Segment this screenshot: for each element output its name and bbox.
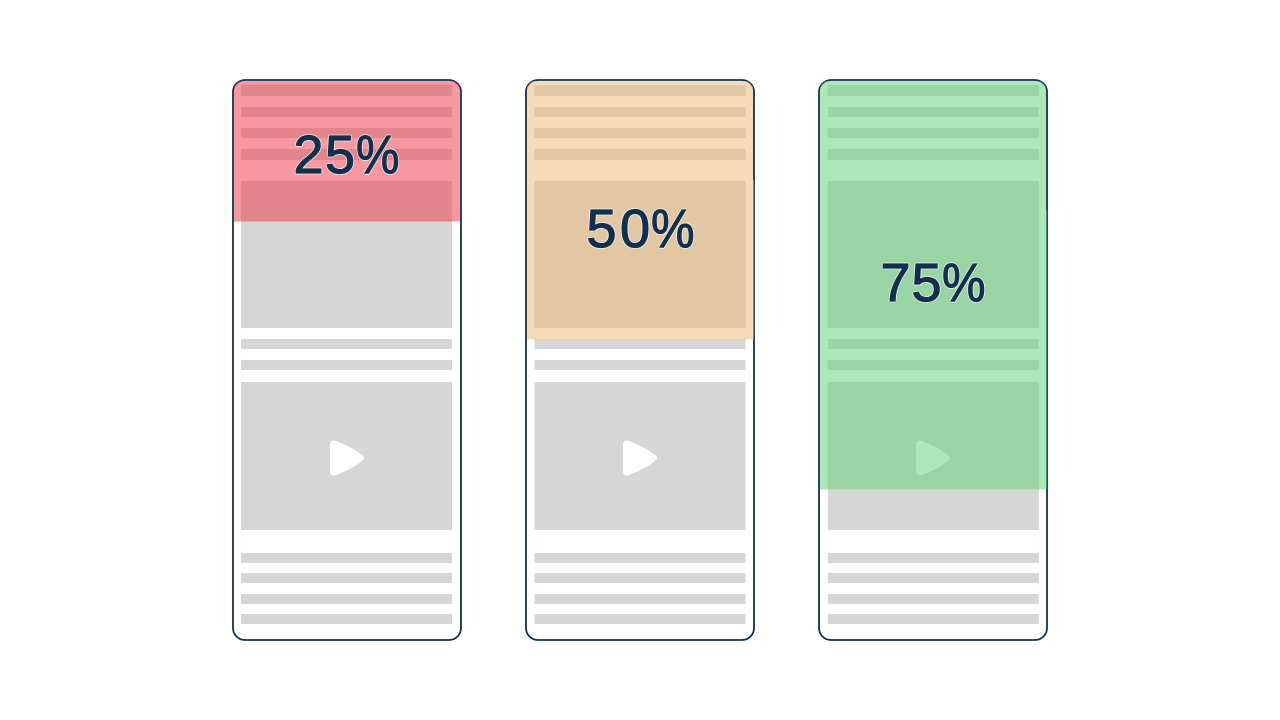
panel: 25% scroll depth page xyxy=(233,80,461,640)
percentage label: 25%: % xyxy=(356,125,400,185)
page outline xyxy=(819,80,1047,640)
percentage label: 25%: 25 xyxy=(294,125,355,185)
icon: play button xyxy=(330,440,364,476)
percentage label: 25%: % xyxy=(356,125,400,185)
percentage label: 75%: % xyxy=(942,253,986,313)
page outline xyxy=(526,80,754,640)
percentage label: 50% xyxy=(586,199,694,259)
percentage label: 25% xyxy=(294,125,400,185)
page content placeholders xyxy=(241,85,452,624)
highlight overlay: top 75% xyxy=(820,81,1047,490)
highlight overlay: top 50% xyxy=(527,81,754,340)
percentage label: 75%: 75 xyxy=(880,253,942,313)
highlight overlay: top 25% xyxy=(234,81,460,222)
panel: 75% scroll depth page xyxy=(819,80,1047,640)
percentage label: 75% xyxy=(880,253,986,313)
percentage label: 50%: % xyxy=(651,199,694,259)
icon: play button xyxy=(916,440,950,476)
percentage label: 25%: 25 xyxy=(294,125,355,185)
percentage label: 75%: % xyxy=(942,253,986,313)
page content placeholders xyxy=(828,85,1039,624)
percentage label: 75%: 75 xyxy=(880,253,942,313)
panel: 50% scroll depth page xyxy=(526,80,754,640)
page content placeholders xyxy=(534,85,746,624)
percentage label: 50%: 50 xyxy=(586,199,650,259)
page outline xyxy=(233,80,461,640)
icon: play button xyxy=(623,440,657,476)
percentage label: 50%: % xyxy=(651,199,694,259)
percentage label: 50%: 50 xyxy=(586,199,650,259)
